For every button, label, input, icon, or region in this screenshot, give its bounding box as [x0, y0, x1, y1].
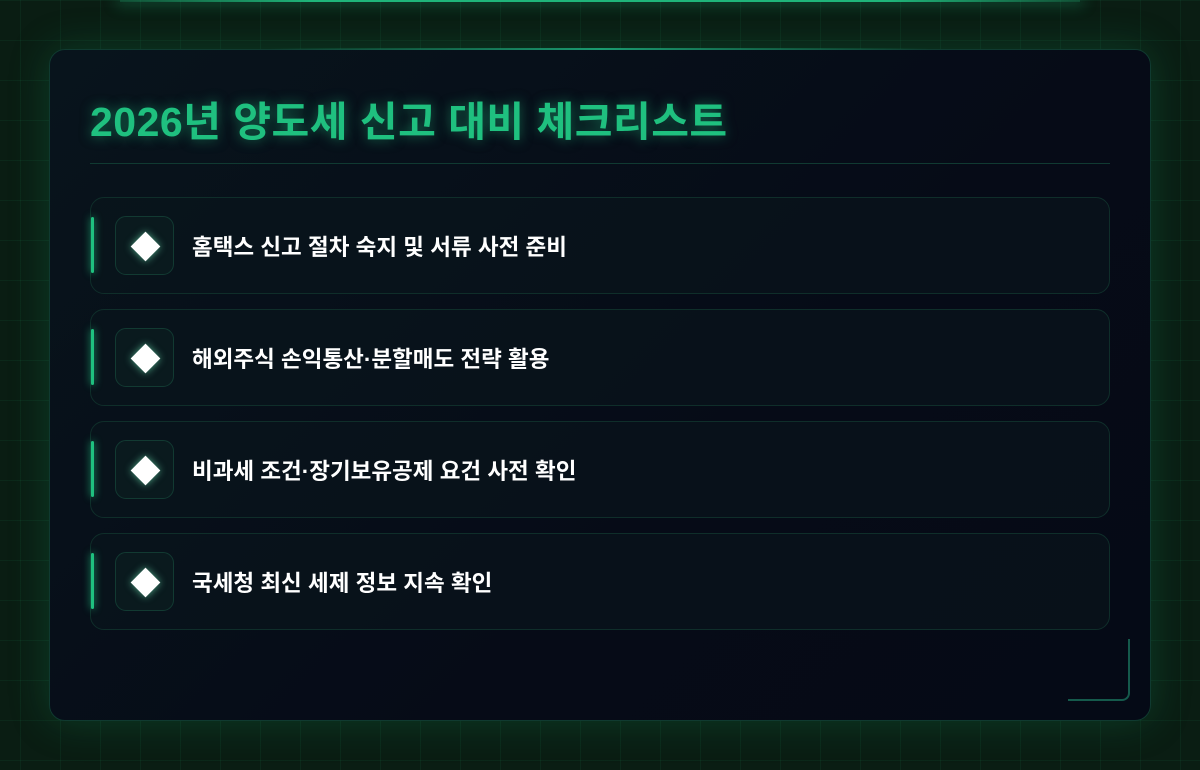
- title: 2026년 양도세 신고 대비 체크리스트: [90, 99, 728, 145]
- item 2: [90, 309, 1110, 406]
- item 3: [90, 421, 1110, 518]
- item 4: [90, 533, 1110, 630]
- item 4: 국세청 최신 세제 정보 지속 확인: [192, 571, 492, 596]
- item 1: 홈택스 신고 절차 숙지 및 서류 사전 준비: [192, 235, 567, 260]
- item 1: [90, 197, 1110, 294]
- corner bracket: [1068, 639, 1130, 701]
- item 3: 비과세 조건·장기보유공제 요건 사전 확인: [192, 459, 576, 484]
- item 2: 해외주식 손익통산·분할매도 전략 활용: [192, 347, 549, 372]
